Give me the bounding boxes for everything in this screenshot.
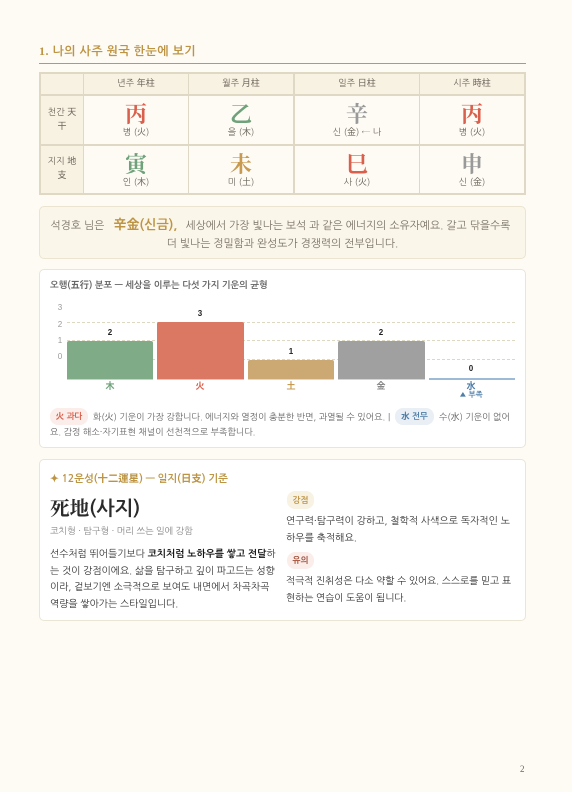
bar chart: 2: [379, 328, 383, 337]
badge: caution: [287, 552, 314, 569]
chart commentary: |: [388, 413, 390, 422]
strength text: 하우를 축적해요.: [286, 534, 357, 543]
stem: sin: [295, 96, 419, 144]
bar chart: ▲ 부족: [459, 392, 483, 399]
stage description: 선수처럼 뛰어들기보다 코치처럼 노하우를 쌓고 전달하: [50, 550, 276, 559]
stage keywords: 코치형 · 탐구형 · 머리 쓰는 일에 강함: [50, 527, 193, 536]
stage description: [50, 548, 276, 609]
chart commentary: [50, 408, 510, 437]
column header: month: 월주 月柱: [222, 79, 260, 88]
stage description: 이라, 겉보기엔 소극적으로 보여도 내면에서 차곡차곡: [50, 583, 269, 592]
branch: in: [84, 146, 188, 193]
stem: byeong: 병 (火): [123, 128, 149, 137]
bar chart: [58, 303, 515, 399]
bar chart: 2: [58, 320, 62, 329]
column header: day: 일주 日柱: [338, 79, 376, 88]
row header: earthly branches: [41, 146, 83, 193]
bar: metal: [338, 341, 425, 380]
badge: strength: 강점: [292, 497, 308, 505]
badge: water absent: [395, 408, 434, 425]
branch: sa: 巳: [346, 148, 368, 179]
bar chart: 0: [58, 352, 62, 361]
panel heading: ✦ 12운성(十二運星) — 일지(日支) 기준: [50, 473, 228, 484]
callout: day master summary: 세상에서 가장 빛나는 보석 과 같은 에너지의 소유자예요. 갈고 닦을수록: [186, 220, 510, 231]
badge: water absent: 水 전무: [401, 413, 428, 421]
section heading: 1. 나의 사주 원국 한눈에 보기: [39, 44, 196, 58]
column header: month: [189, 74, 293, 94]
stem: byeong: 丙: [125, 98, 147, 129]
branch: sa: [295, 146, 419, 193]
branch: sin hour: [420, 146, 524, 193]
callout: day master summary: 辛金(신금),: [114, 218, 177, 231]
branch: sin hour: 신 (金): [459, 178, 485, 187]
bar chart: 火: [195, 382, 204, 391]
stem: sin: 辛: [346, 98, 368, 129]
bar: fire: [157, 322, 244, 380]
bar: wood: [67, 341, 153, 380]
stage description: 는 것이 강점이에요. 삶을 탐구하고 깊이 파고드는 성향: [50, 567, 275, 576]
row header: heavenly stems: 천간 天: [48, 108, 76, 117]
caution text: 적극적 진취성은 다소 약할 수 있어요. 스스로를 믿고 표: [286, 577, 511, 586]
callout: day master summary: [39, 206, 526, 259]
panel: five elements chart: [39, 269, 526, 448]
chart commentary: 화(火) 기운이 가장 강합니다. 에너지와 열정이 충분한 반면, 과열될 수 있어요.: [93, 413, 385, 422]
badge: fire excess: [50, 408, 88, 425]
column header: hour: [420, 74, 524, 94]
row header: earthly branches: 지지 地: [48, 157, 76, 166]
chart title: 오행(五行) 분포 — 세상을 이루는 다섯 가지 기운의 균형: [50, 281, 268, 290]
row header: heavenly stems: [41, 96, 83, 144]
bar: earth: [248, 360, 334, 380]
stem: sin: 신 (金) ← 나: [333, 128, 381, 137]
stem: byeong hour: [420, 96, 524, 144]
badge: strength: [287, 491, 314, 509]
branch: sa: 사 (火): [344, 178, 370, 187]
bar chart: 1: [289, 347, 293, 356]
stem: eul: 을 (木): [228, 128, 254, 137]
stem: byeong hour: 병 (火): [459, 128, 485, 137]
row header: earthly branches: 支: [57, 171, 66, 180]
strength text: [286, 516, 510, 543]
chart commentary: 수(水) 기운이 없어: [439, 413, 510, 422]
bar chart: 木: [105, 382, 114, 391]
branch: sin hour: 申: [461, 148, 483, 179]
row header: heavenly stems: 干: [57, 122, 66, 131]
chart commentary: 요. 감정 해소·자기표현 채널이 선천적으로 부족합니다.: [50, 428, 255, 437]
stem: eul: [189, 96, 293, 144]
badge: caution: 유의: [292, 557, 308, 565]
branch: mi: 미 (土): [228, 178, 254, 187]
column header: hour: 시주 時柱: [453, 79, 491, 88]
stem: byeong: [84, 96, 188, 144]
bar chart: 土: [286, 382, 296, 391]
saju table: [39, 72, 526, 195]
stem: eul: 乙: [230, 98, 252, 129]
stem: byeong hour: 丙: [461, 98, 483, 129]
branch: mi: 未: [230, 148, 252, 179]
strength text: 연구력·탐구력이 강하고, 철학적 사색으로 독자적인 노: [286, 517, 510, 526]
bar chart: 0: [469, 364, 473, 373]
bar chart: 金: [376, 382, 386, 391]
column header: year: 년주 年柱: [117, 79, 155, 88]
panel: twelve stages: [39, 459, 526, 621]
branch: in: 寅: [125, 148, 147, 179]
stage name: 死地(사지): [50, 492, 140, 521]
caution text: [286, 576, 511, 603]
caution text: 현하는 연습이 도움이 됩니다.: [286, 594, 406, 603]
stage description: 역량을 쌓아가는 스타일입니다.: [50, 600, 178, 609]
page number: 2: [520, 764, 524, 774]
column header: day: [295, 74, 419, 94]
bar chart: 3: [198, 309, 202, 318]
bar chart: 2: [108, 328, 112, 337]
bar chart: 3: [58, 303, 62, 312]
branch: mi: [189, 146, 293, 193]
callout: day master summary: 석경호 님은: [50, 220, 104, 231]
column header: year: [84, 74, 188, 94]
bar: water: [429, 378, 515, 380]
bar chart: 1: [58, 336, 62, 345]
branch: in: 인 (木): [123, 178, 149, 187]
badge: fire excess: 火 과다: [56, 413, 82, 421]
callout: day master summary: 더 빛나는 정밀함과 완성도가 경쟁력의 전부입니다.: [167, 238, 398, 249]
bar chart: 水: [466, 382, 476, 391]
